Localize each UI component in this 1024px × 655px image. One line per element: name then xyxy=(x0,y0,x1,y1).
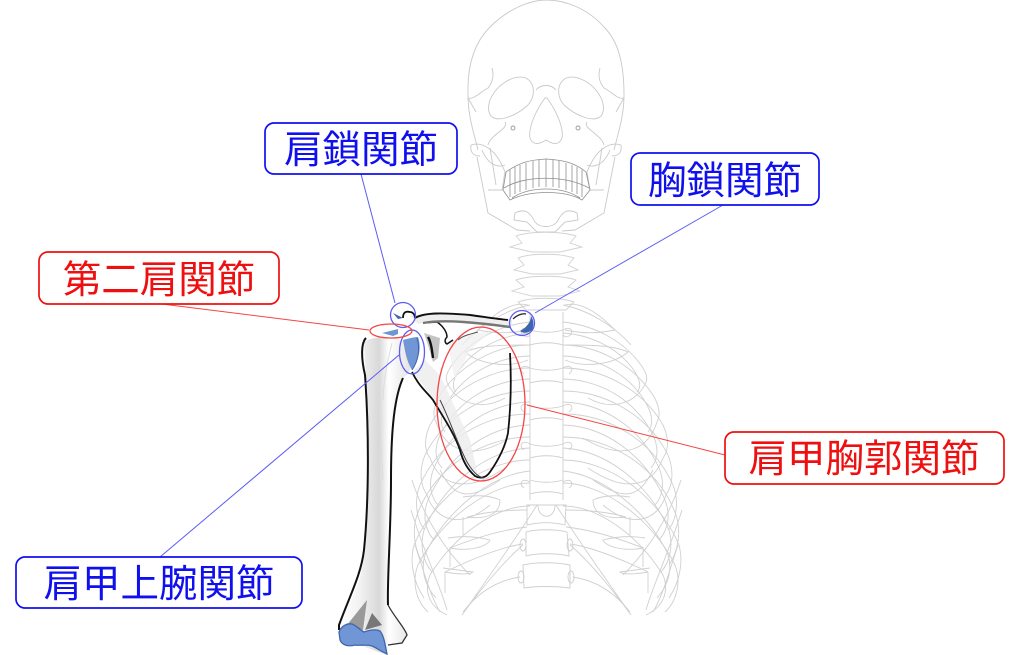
label: 胸鎖関節 xyxy=(631,153,819,205)
label: 肩甲上腕関節 xyxy=(16,557,302,608)
clavicle xyxy=(403,312,512,327)
ring: glenohumeral joint xyxy=(400,330,424,374)
label: 第二肩関節 xyxy=(39,252,279,304)
label: 肩甲胸郭関節 xyxy=(725,432,1004,484)
rib cage left xyxy=(411,304,537,615)
humerus xyxy=(338,337,413,655)
cervical spine xyxy=(510,232,582,310)
label: 肩甲上腕関節: 肩甲上腕関節 xyxy=(43,563,275,606)
scapula xyxy=(412,322,511,478)
skull xyxy=(468,0,624,232)
second shoulder surface xyxy=(382,329,398,336)
leader: 肩甲上腕関節 xyxy=(160,355,399,557)
label: 胸鎖関節: 胸鎖関節 xyxy=(648,160,802,203)
label: 肩鎖関節: 肩鎖関節 xyxy=(284,129,438,172)
teeth xyxy=(503,159,590,200)
leader: 肩鎖関節 xyxy=(361,174,395,303)
sternoclavicular surface xyxy=(520,316,533,333)
thoracic spine xyxy=(518,312,574,588)
leader: 第二肩関節 xyxy=(162,304,369,330)
ring: acromioclavicular joint xyxy=(390,302,416,328)
acromioclavicular surface xyxy=(393,313,403,319)
ring: sternoclavicular joint xyxy=(510,310,534,336)
rib cage right xyxy=(556,304,682,615)
leader: 肩甲胸郭関節 xyxy=(527,405,725,455)
ring: scapulothoracic joint xyxy=(437,327,525,481)
label: 肩鎖関節 xyxy=(265,123,457,174)
leader: 胸鎖関節 xyxy=(535,205,723,313)
label: 第二肩関節: 第二肩関節 xyxy=(63,259,255,302)
ring: second shoulder joint xyxy=(370,324,412,338)
glenohumeral surface xyxy=(403,337,420,370)
label: 肩甲胸郭関節: 肩甲胸郭関節 xyxy=(748,438,980,481)
humerus articular surface: elbow xyxy=(339,624,387,654)
